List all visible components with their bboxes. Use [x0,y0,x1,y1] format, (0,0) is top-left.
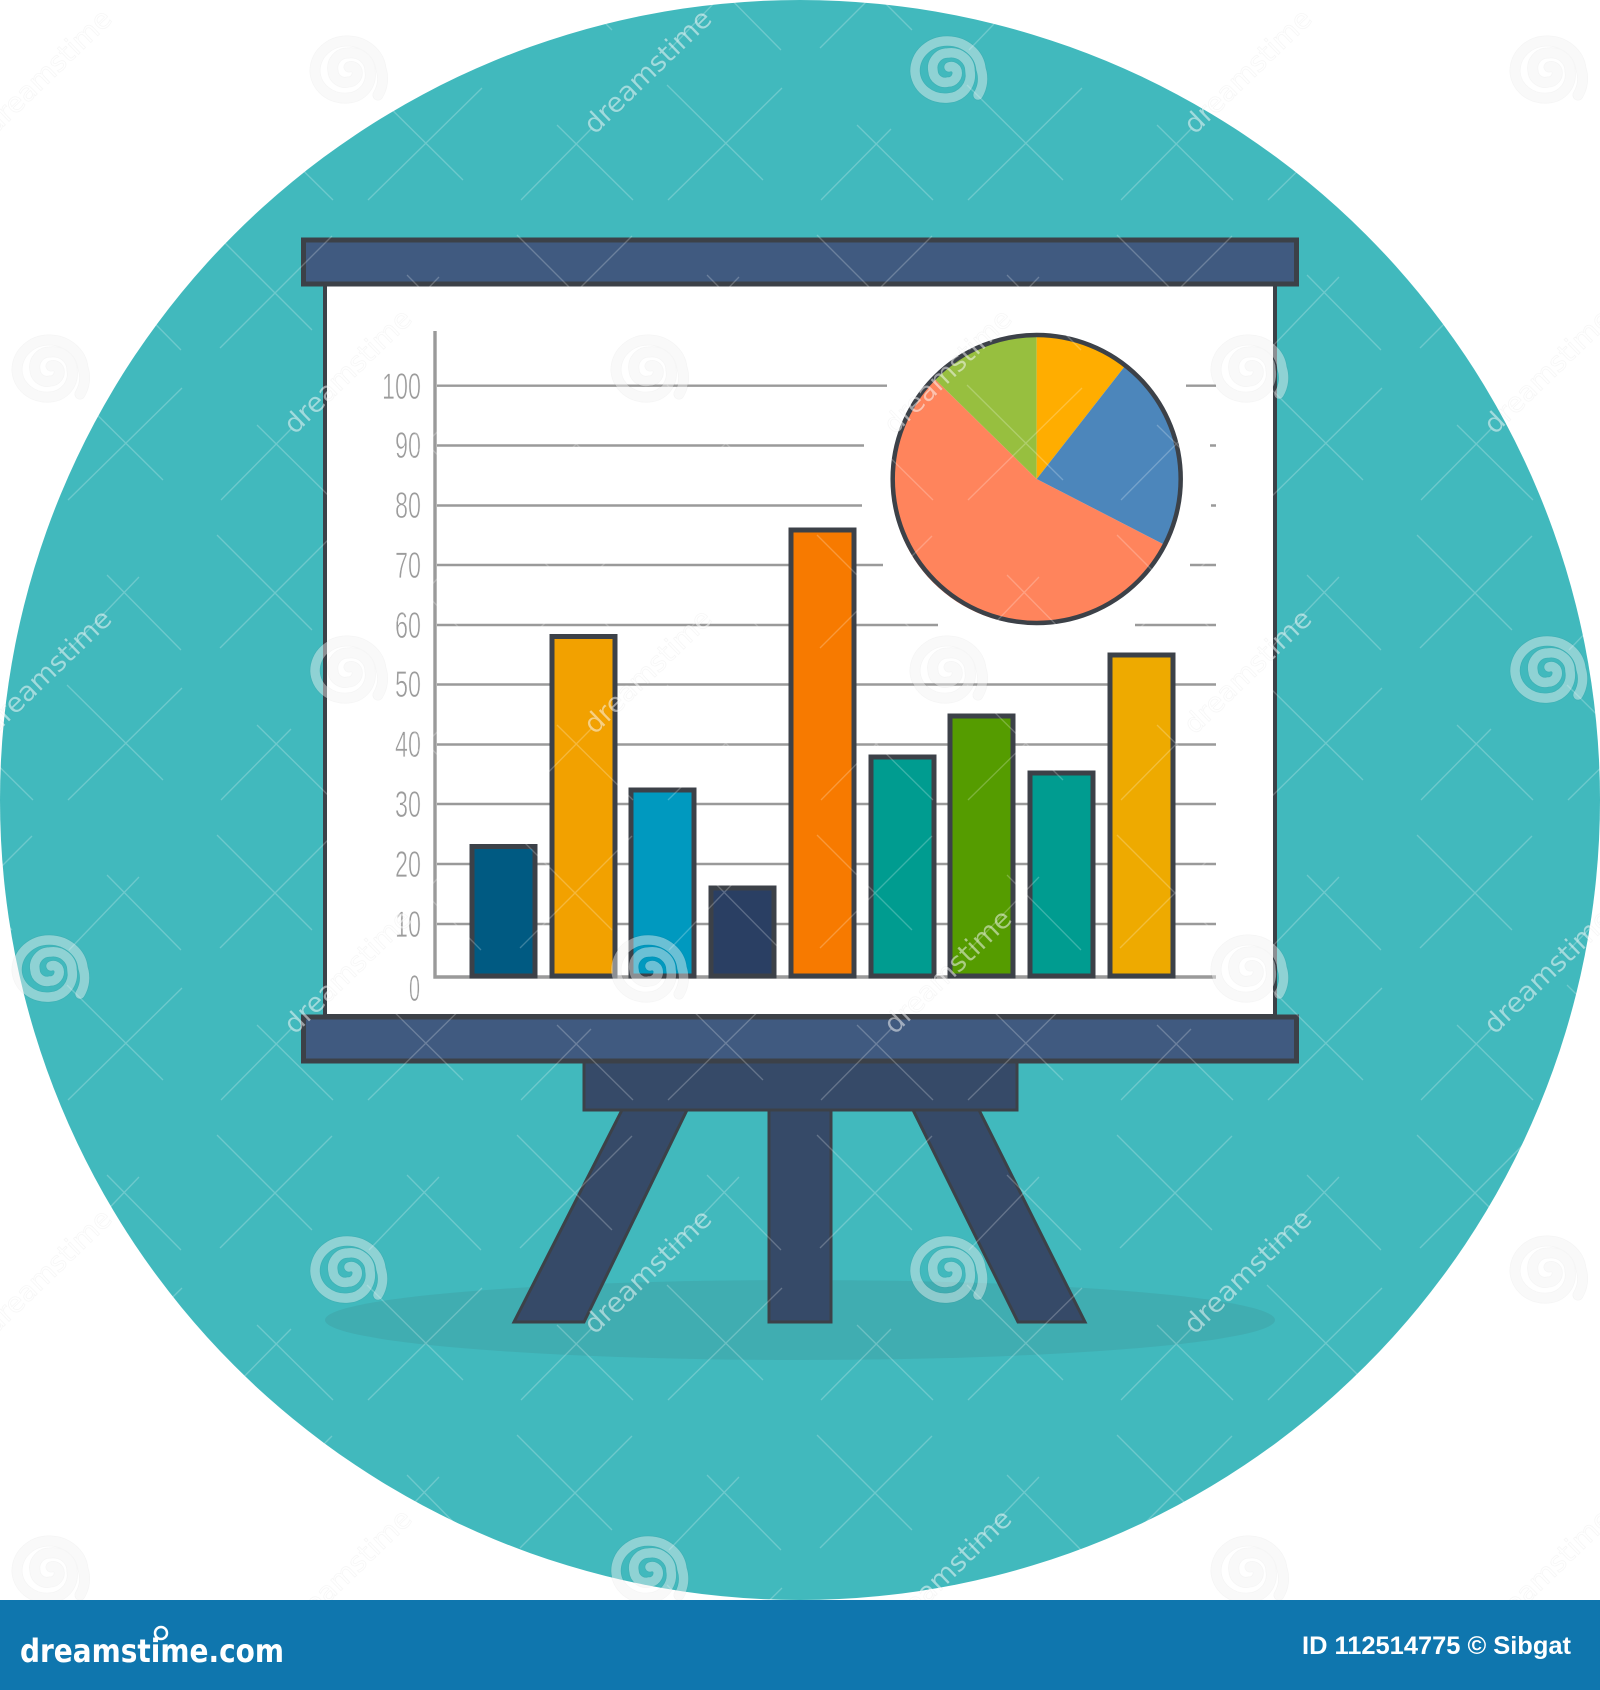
axis labels: 70 [395,545,421,586]
pie outline [893,335,1181,623]
watermark text: dreamstime [1178,3,1318,140]
watermark text: dreamstime [578,1203,718,1340]
axis labels: 90 [395,425,421,466]
footer bar [0,1600,1600,1690]
axis labels: 0 [409,968,420,1009]
axis labels: 10 [395,904,421,945]
presentation screen [325,282,1275,1016]
easel stand [514,1060,1085,1322]
watermark text: dreamstime [578,603,718,740]
watermark text: dreamstime [578,3,718,140]
watermark text: dreamstime [278,1503,418,1640]
pie chart [891,335,1181,625]
axis labels: 100 [382,366,421,407]
axis labels: 30 [395,784,421,825]
axis labels: 80 [395,485,421,526]
pie slice: green [935,336,1037,479]
footer image ID: ID 112514775 © Sibgat [1302,1632,1572,1660]
watermark text: dreamstime [1178,1203,1318,1340]
axis labels: 50 [395,664,421,705]
chart axes [435,331,1216,977]
watermark text: dreamstime [878,1503,1018,1640]
watermark text: dreamstime [278,903,418,1040]
watermark text: dreamstime [878,303,1018,440]
axis labels: 20 [395,844,421,885]
footer logo: dreamstime.com [20,1632,284,1670]
pie slice: coral [891,379,1163,625]
bars [472,530,1173,976]
axis labels: 60 [395,605,421,646]
watermark text: dreamstime [878,903,1018,1040]
axis labels: 40 [395,724,421,765]
grid lines [437,386,1216,924]
watermark text: dreamstime [1178,603,1318,740]
floor shadow [325,1280,1275,1360]
bottom roller bar [304,1017,1296,1061]
watermark text: dreamstime [278,303,418,440]
bar chart [382,331,1216,1009]
top roller bar [304,240,1296,284]
pie slice: blue [1037,366,1179,544]
pie slice: yellow [1037,336,1125,479]
axis labels [382,366,421,1009]
